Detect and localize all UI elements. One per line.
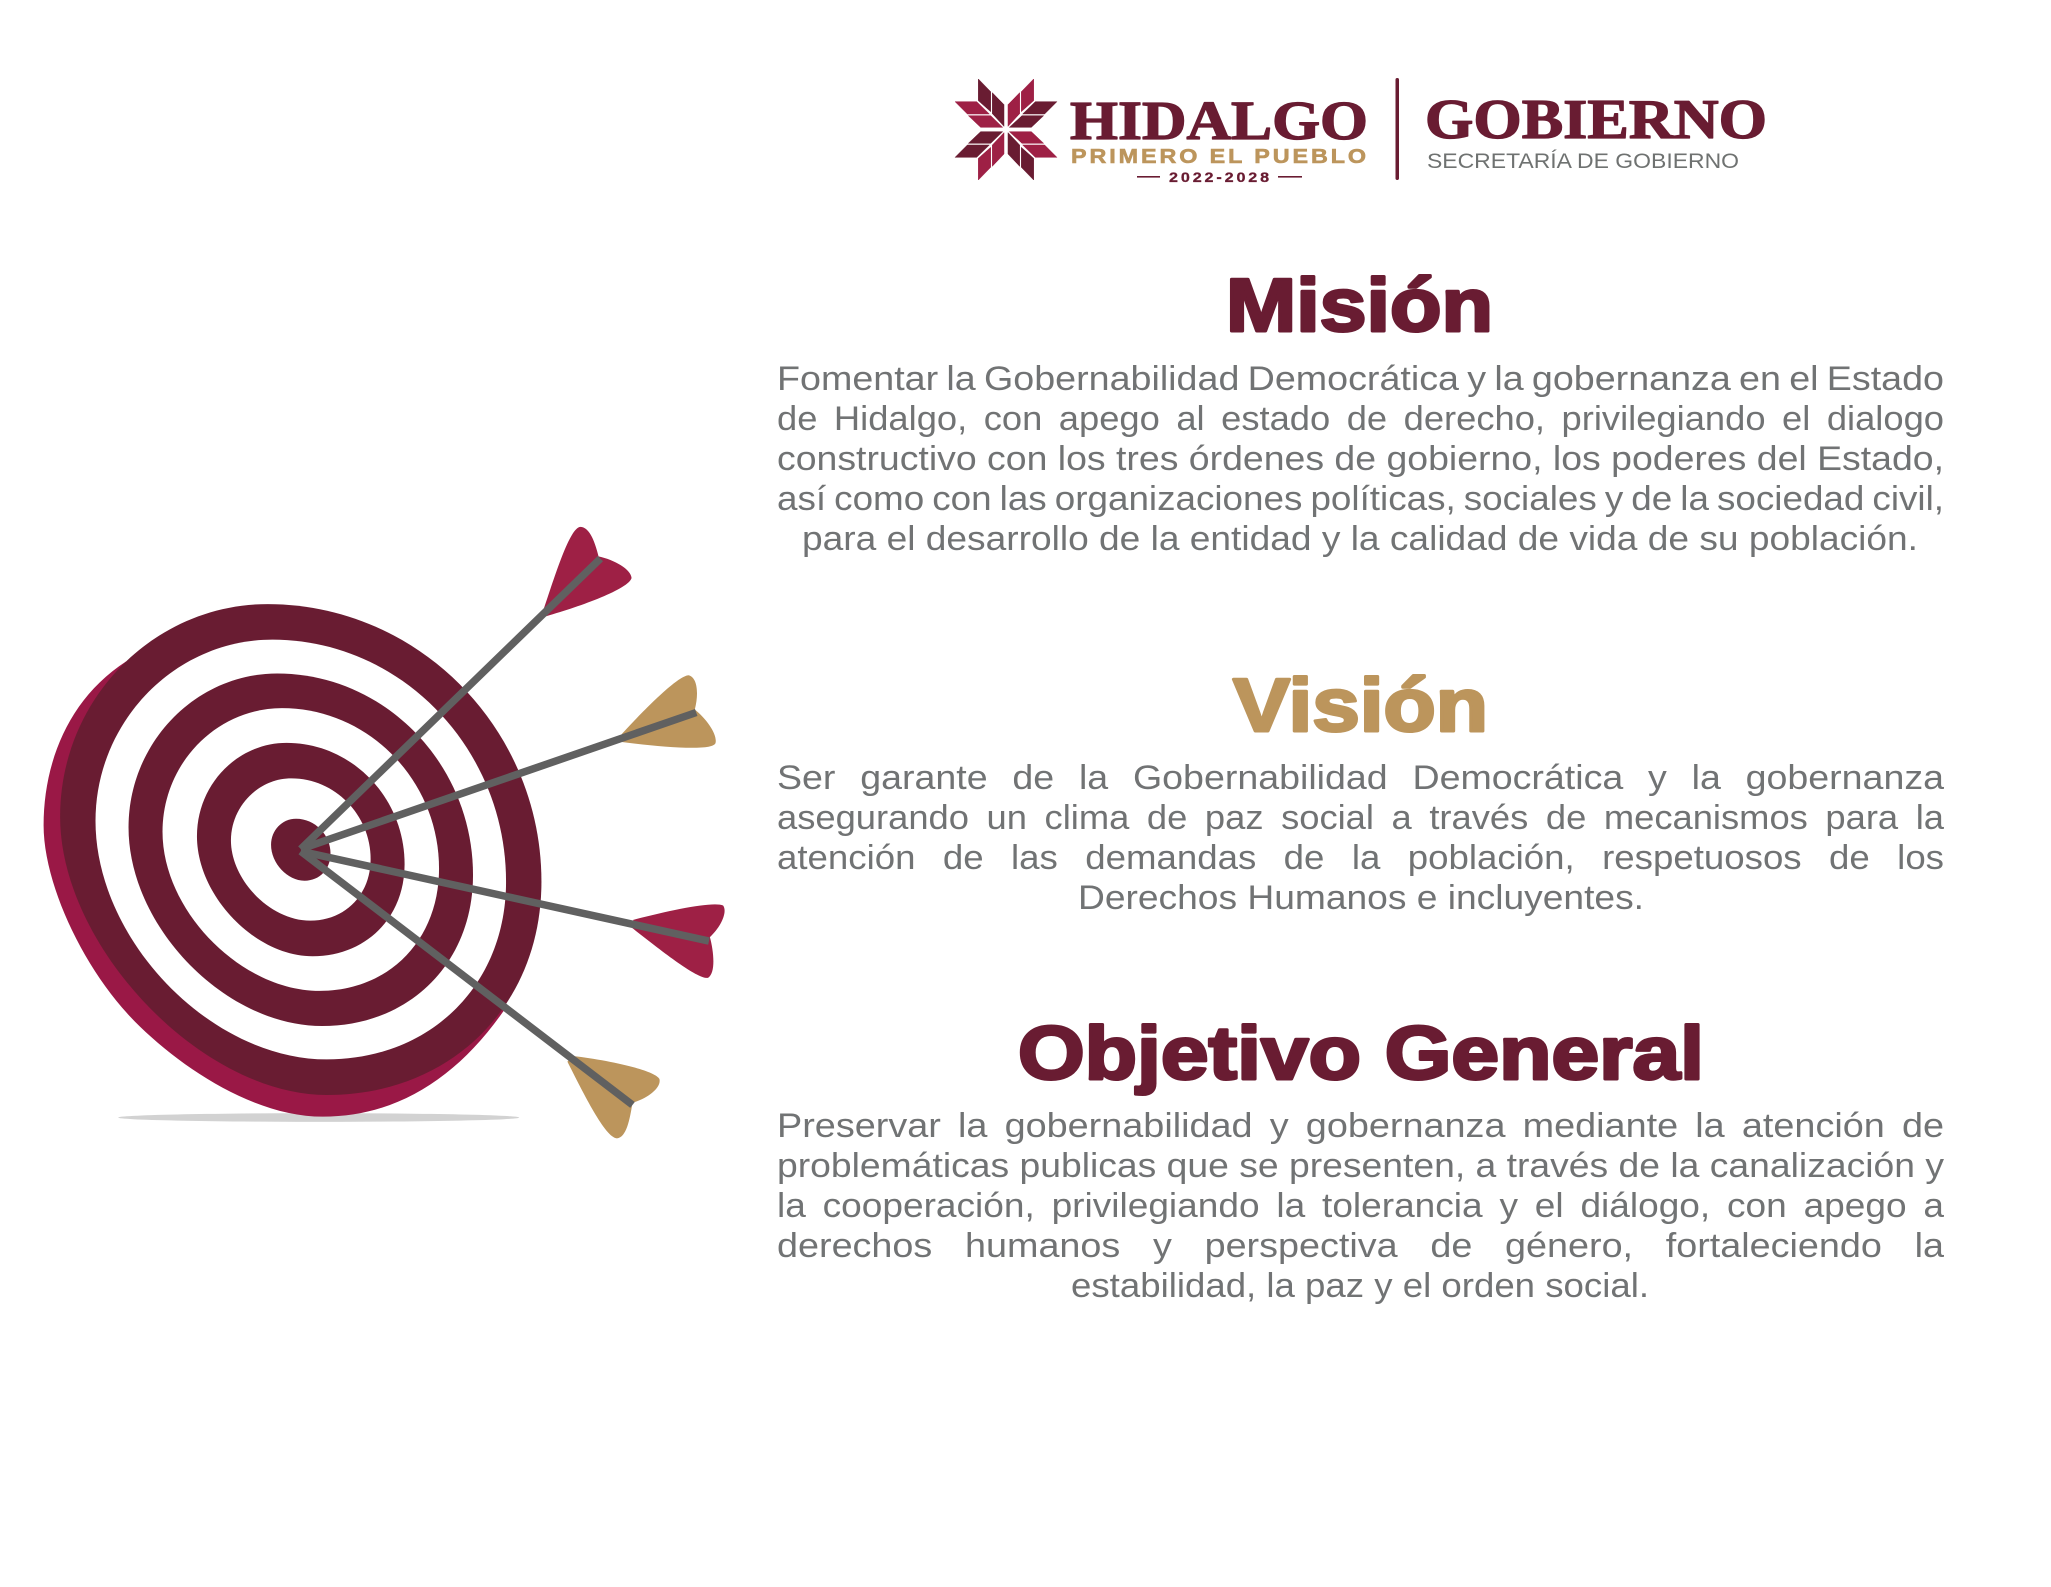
text block: mission: constructivo con los tres órdenes de gobierno, los poderes del Estado, bbox=[777, 440, 1944, 478]
text block: general objective: Preservar la gobernabilidad y gobernanza mediante la atención de bbox=[777, 1107, 1944, 1145]
target board bbox=[44, 604, 541, 1117]
wordmark: HIDALGO: HIDALGO bbox=[1070, 90, 1368, 151]
icon: Hidalgo star emblem bbox=[955, 79, 1057, 180]
text block: vision: Derechos Humanos e incluyentes. bbox=[1078, 879, 1644, 917]
text block: vision: Ser garante de la Gobernabilidad Democrática y la gobernanza bbox=[777, 759, 1944, 797]
text block: general objective: problemáticas publicas que se presenten, a través de la canalización y bbox=[777, 1147, 1944, 1185]
arrow: tan upper right bbox=[301, 675, 716, 849]
text block: mission: para el desarrollo de la entidad y la calidad de vida de su población. bbox=[802, 520, 1918, 558]
text block: vision: atención de las demandas de la población, respetuosos de los bbox=[777, 839, 1944, 877]
text block: mission: de Hidalgo, con apego al estado de derecho, privilegiando el dialogo bbox=[777, 400, 1944, 438]
text block: general objective: derechos humanos y perspectiva de género, fortaleciendo la bbox=[777, 1227, 1944, 1265]
arrow: crimson top bbox=[301, 527, 632, 849]
heading: Visión: Visión bbox=[1233, 663, 1488, 747]
text block: vision: asegurando un clima de paz social a través de mecanismos para la bbox=[777, 799, 1944, 837]
wordmark: GOBIERNO: GOBIERNO bbox=[1425, 89, 1767, 151]
heading: Misión: Misión bbox=[1226, 263, 1493, 347]
text block: general objective: la cooperación, privilegiando la tolerancia y el diálogo, con apego a bbox=[777, 1187, 1944, 1225]
text block: general objective: estabilidad, la paz y el orden social. bbox=[1071, 1267, 1649, 1305]
arrow: crimson lower right bbox=[301, 851, 725, 978]
arrow: tan bottom bbox=[301, 851, 660, 1138]
text block: mission bbox=[777, 360, 1944, 558]
heading: Objetivo General: Objetivo General bbox=[1018, 1011, 1704, 1095]
target ground shadow bbox=[118, 1113, 519, 1122]
logo: Hidalgo Gobierno header bbox=[955, 78, 1767, 185]
text block: mission: así como con las organizaciones políticas, sociales y de la sociedad civil, bbox=[777, 480, 1944, 518]
period: 2022-2028: 2022-2028 bbox=[1169, 169, 1272, 185]
text block: vision bbox=[777, 759, 1944, 917]
text block: general objective bbox=[777, 1107, 1944, 1305]
text block: mission: Fomentar la Gobernabilidad Democrática y la gobernanza en el Estado bbox=[777, 360, 1944, 398]
subtitle: Secretaría de Gobierno: SECRETARÍA DE GOBIERNO bbox=[1427, 150, 1739, 173]
illustration: target with four arrows bbox=[44, 527, 725, 1138]
tagline: Primero el pueblo: PRIMERO EL PUEBLO bbox=[1071, 146, 1369, 168]
